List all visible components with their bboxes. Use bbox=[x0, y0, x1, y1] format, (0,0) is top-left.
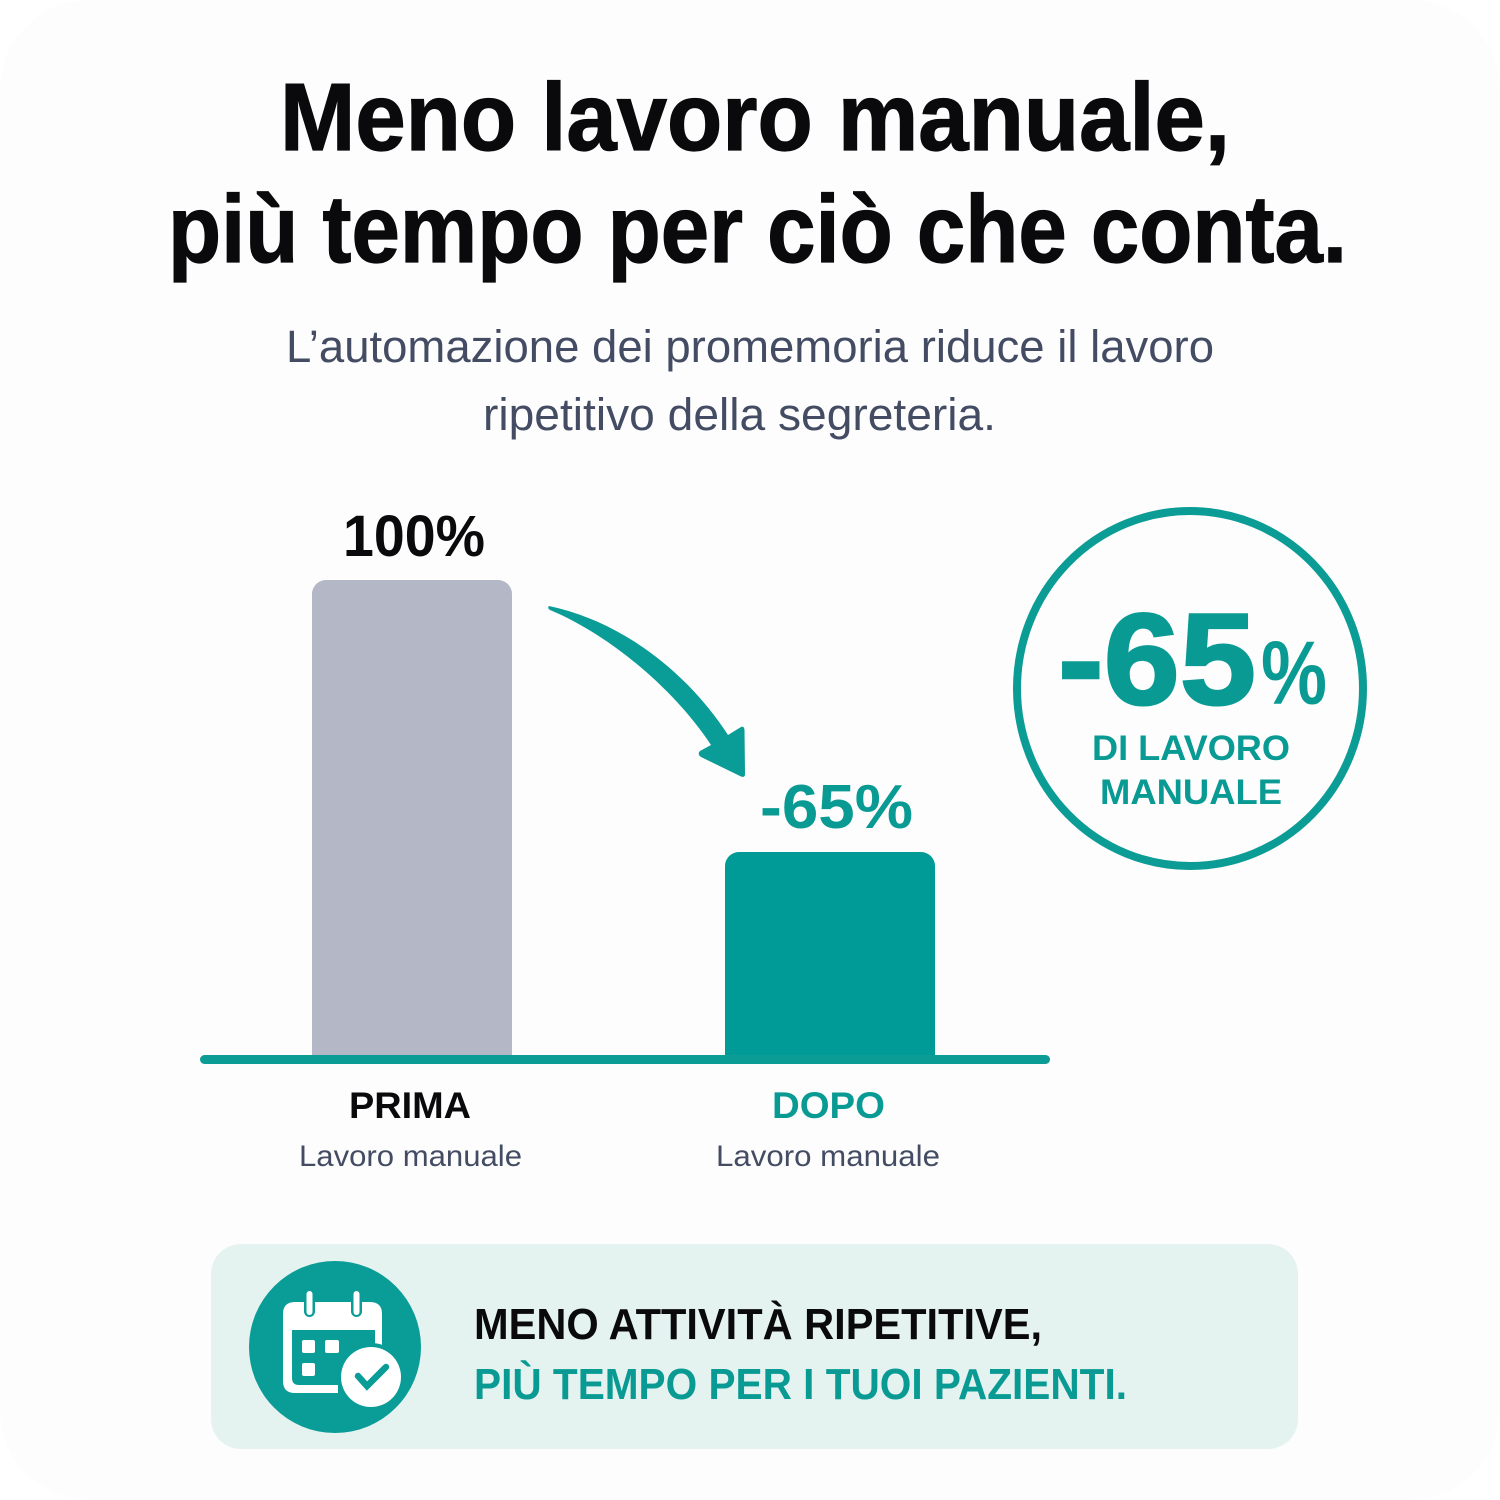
badge caption bbox=[1092, 729, 1290, 812]
label: dopo: DOPO bbox=[772, 1085, 885, 1126]
label: prima: PRIMA bbox=[349, 1085, 471, 1126]
icon: calendar with check bbox=[249, 1261, 421, 1433]
bar: dopo bbox=[725, 852, 935, 1058]
message line 2: PIÙ TEMPO PER I TUOI PAZIENTI. bbox=[474, 1359, 1127, 1409]
value: 100%: 100% bbox=[343, 504, 485, 569]
title bbox=[168, 64, 1347, 283]
subtitle bbox=[286, 321, 1214, 440]
label: dopo: Lavoro manuale bbox=[716, 1140, 940, 1173]
big number: -65 bbox=[1058, 586, 1256, 732]
bar chart bbox=[200, 504, 1050, 1173]
label: prima: Lavoro manuale bbox=[299, 1140, 522, 1173]
callout: -65% badge bbox=[1017, 511, 1363, 866]
subtitle: ripetitivo della segreteria. bbox=[483, 389, 996, 440]
badge caption: MANUALE bbox=[1100, 773, 1282, 812]
title: più tempo per ciò che conta. bbox=[168, 176, 1347, 283]
arrow bbox=[548, 606, 745, 777]
axis line bbox=[200, 1055, 1050, 1064]
label: prima bbox=[299, 1085, 522, 1173]
label: dopo bbox=[716, 1085, 940, 1173]
panel: bottom message bbox=[211, 1244, 1298, 1449]
value: -65%: -65% bbox=[760, 773, 913, 842]
subtitle: L’automazione dei promemoria riduce il lavoro bbox=[286, 321, 1214, 372]
percent sign: % bbox=[1261, 624, 1327, 724]
message line 1: MENO ATTIVITÀ RIPETITIVE, bbox=[474, 1299, 1042, 1349]
bar: prima bbox=[312, 580, 512, 1058]
title: Meno lavoro manuale, bbox=[280, 64, 1230, 171]
badge caption: DI LAVORO bbox=[1092, 729, 1290, 768]
